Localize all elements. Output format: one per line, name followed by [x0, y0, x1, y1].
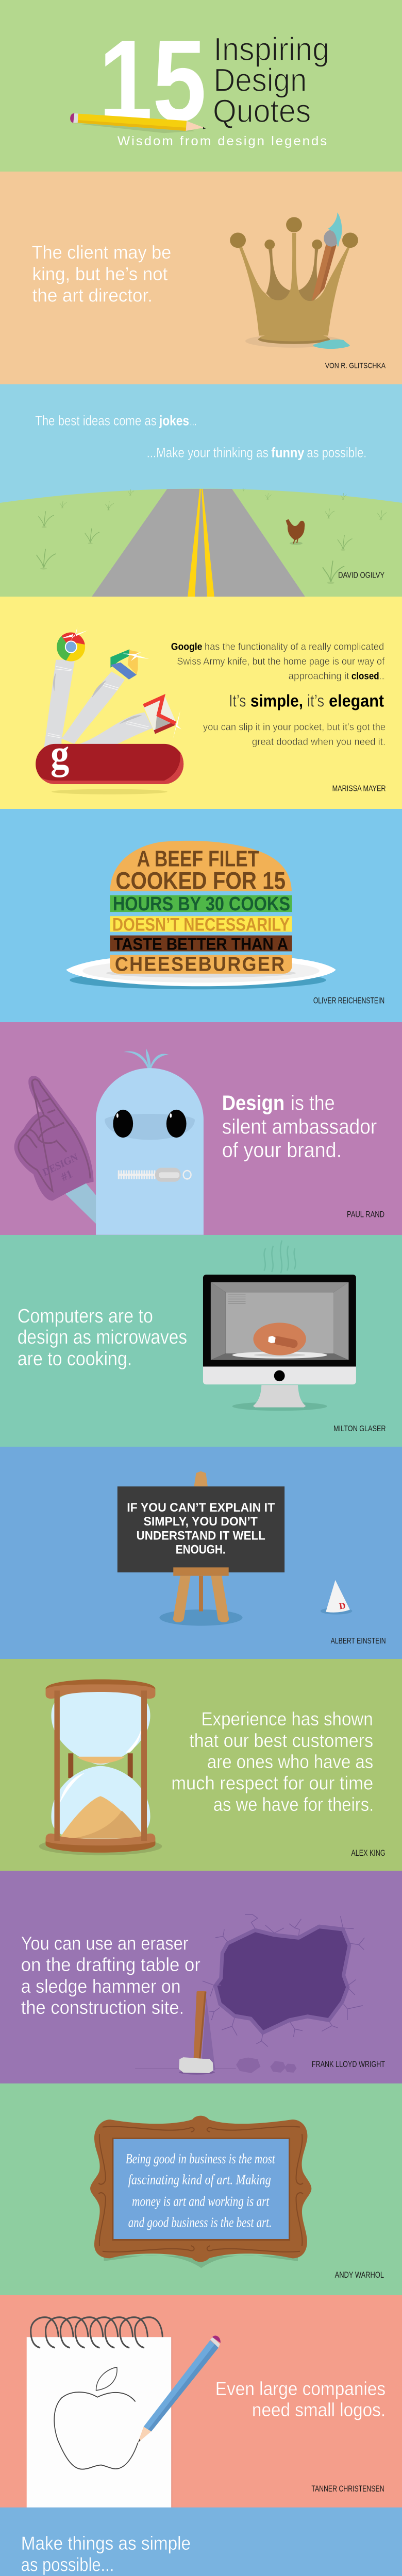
quote text: Make things as simple: [21, 2533, 191, 2554]
icon: google swiss army knife: [36, 627, 183, 794]
quote text: Google: [171, 642, 202, 653]
quote text: Swiss Army knife, but the home page is our way of: [177, 656, 385, 667]
author: PAUL RAND: [347, 1210, 384, 1219]
quote text: jokes: [159, 413, 189, 429]
icon: hourglass: [39, 1680, 162, 1855]
quote text: [21, 2533, 374, 2576]
author: MILTON GLASER: [333, 1425, 386, 1433]
icon: monitor microwave: [203, 1241, 356, 1411]
burger quote text: DOESN’T NECESSARILY: [112, 914, 290, 935]
icon: dunce cap: [321, 1580, 352, 1615]
icon: ornate picture frame: [90, 2116, 311, 2268]
quote text: The best ideas come as: [35, 413, 157, 429]
burger quote text: COOKED FOR 15: [115, 867, 286, 894]
quote text: You can use an eraser: [21, 1933, 189, 1954]
quote text: simple,: [250, 691, 303, 711]
icon: pencil: [70, 113, 206, 133]
icon: chicken: [286, 519, 305, 545]
quote text: the construction site.: [21, 1997, 184, 2018]
quote text: [32, 242, 171, 306]
quote text: is the: [291, 1091, 335, 1115]
quote text: that our best customers: [189, 1731, 373, 1751]
chalkboard: IF YOU CAN’T EXPLAIN IT: [127, 1501, 275, 1515]
framed quote text: and good business is the best art.: [128, 2215, 272, 2230]
panel: paul rand quote: [0, 1022, 402, 1235]
chalkboard: ENOUGH.: [176, 1543, 226, 1556]
quote text: are to cooking.: [18, 1348, 132, 1369]
author: FRANK LLOYD WRIGHT: [312, 2059, 385, 2069]
icon: blue mascot with zipped mouth: [96, 1048, 204, 1235]
icon: hole in wall: [203, 1914, 364, 2046]
burger quote text: TASTE BETTER THAN A: [113, 935, 288, 954]
panel: albert einstein chalkboard quote: [0, 1447, 402, 1659]
panel: david ogilvy quote: [0, 384, 402, 597]
quote text: [21, 1933, 200, 2018]
icon: foam finger: #1: [59, 1167, 74, 1184]
icon: google swiss army knife: g: [51, 731, 69, 777]
road landscape: [0, 488, 402, 597]
panel: title header: [0, 0, 402, 172]
burger quote text: HOURS BY 30 COOKS: [113, 892, 290, 914]
quote text: [35, 413, 366, 461]
framed quote text: fascinating kind of art. Making: [128, 2172, 271, 2188]
quote text: as possible.: [307, 445, 366, 461]
quote text: elegant: [329, 691, 384, 711]
quote text: much respect for our time: [171, 1773, 373, 1794]
author: OLIVER REICHENSTEIN: [313, 996, 384, 1006]
title number 15: 15: [98, 15, 206, 145]
burger quote text: A BEEF FILET: [137, 846, 259, 871]
quote text: as possible...: [21, 2554, 114, 2575]
quote text: [171, 1709, 374, 1815]
burger quote text: [112, 846, 290, 975]
icon: sledge hammer and rubble: [135, 1991, 296, 2075]
quote text: of your brand.: [222, 1139, 342, 1162]
icon: foam finger: DESIGN: [41, 1151, 79, 1178]
panel: andy warhol quote: [0, 2083, 402, 2295]
author: ANDY WARHOL: [335, 2270, 384, 2280]
author: DAVID OGILVY: [338, 571, 385, 580]
quote text: [171, 642, 386, 748]
icon: dunce cap: D: [339, 1601, 346, 1611]
author: MARISSA MAYER: [332, 785, 386, 793]
title words: [213, 31, 329, 129]
author: VON R. GLITSCHKA: [325, 362, 386, 370]
panel: marissa mayer quote: [0, 597, 402, 809]
panel: milton glaser quote: [0, 1235, 402, 1447]
quote text: king, but he’s not: [32, 263, 168, 284]
icon: spiral notepad with apple sketch: [27, 2317, 172, 2507]
subtitle: Wisdom from design legends: [118, 134, 327, 148]
quote text: are ones who have as: [207, 1752, 373, 1772]
quote text: Even large companies: [215, 2379, 386, 2399]
quote text: ...Make your thinking as: [147, 445, 269, 461]
quote text: on the drafting table or: [21, 1955, 200, 1975]
quote text: ...: [190, 413, 197, 429]
quote text: the art director.: [32, 284, 153, 306]
panel: von glitschka quote: [0, 172, 402, 384]
title words: Design: [213, 62, 307, 98]
chalkboard: SIMPLY, YOU DON’T: [144, 1515, 258, 1529]
quote text: great doodad when you need it.: [252, 737, 386, 748]
chalkboard: UNDERSTAND IT WELL: [137, 1529, 265, 1543]
author: TANNER CHRISTENSEN: [311, 2484, 384, 2494]
title words: Quotes: [213, 93, 311, 129]
icon: cheeseburger on plate: [66, 841, 336, 989]
quote text: it’s: [307, 691, 324, 711]
icon: crown with paintbrush: [230, 212, 358, 349]
icon: foam finger: [14, 1076, 96, 1224]
quote text: closed: [351, 671, 379, 682]
title words: Inspiring: [213, 31, 329, 67]
panel: frank lloyd wright quote: [0, 1871, 402, 2083]
quote text: approaching it: [289, 671, 349, 682]
author: ALEX KING: [351, 1849, 386, 1858]
quote text: need small logos.: [252, 2400, 386, 2421]
burger quote text: CHEESEBURGER: [115, 953, 284, 975]
author: ALBERT EINSTEIN: [331, 1637, 386, 1646]
icon: easel: [159, 1471, 243, 1626]
quote text: The client may be: [32, 242, 171, 263]
quote text: [18, 1304, 187, 1369]
quote text: as we have for theirs.: [213, 1794, 374, 1815]
quote text: It’s: [229, 691, 246, 711]
quote text: Experience has shown: [201, 1709, 373, 1730]
quote text: a sledge hammer on: [21, 1976, 181, 1997]
quote text: you can slip it in your pocket, but it’s got the: [203, 722, 386, 733]
quote text: design as microwaves: [18, 1326, 187, 1348]
quote text: has the functionality of a really complicated: [205, 642, 384, 653]
quote text: ...: [380, 671, 384, 682]
quote text: [222, 1091, 377, 1162]
panel: alex king quote: [0, 1659, 402, 1871]
framed quote text: money is art and working is art: [132, 2194, 270, 2209]
icon: blue pencil: [138, 2335, 221, 2443]
framed quote text: Being good in business is the most: [126, 2151, 275, 2166]
chalkboard: [118, 1486, 284, 1576]
quote text: silent ambassador: [222, 1115, 377, 1139]
quote text: [215, 2379, 386, 2421]
quote text: Computers are to: [18, 1304, 153, 1327]
quote text: funny: [271, 445, 305, 461]
panel: albert einstein brick quote: [0, 2507, 402, 2576]
panel: oliver reichenstein quote: [0, 809, 402, 1022]
framed quote text: [126, 2151, 275, 2230]
quote text: Design: [222, 1091, 284, 1115]
panel: tanner christensen quote: [0, 2295, 402, 2507]
